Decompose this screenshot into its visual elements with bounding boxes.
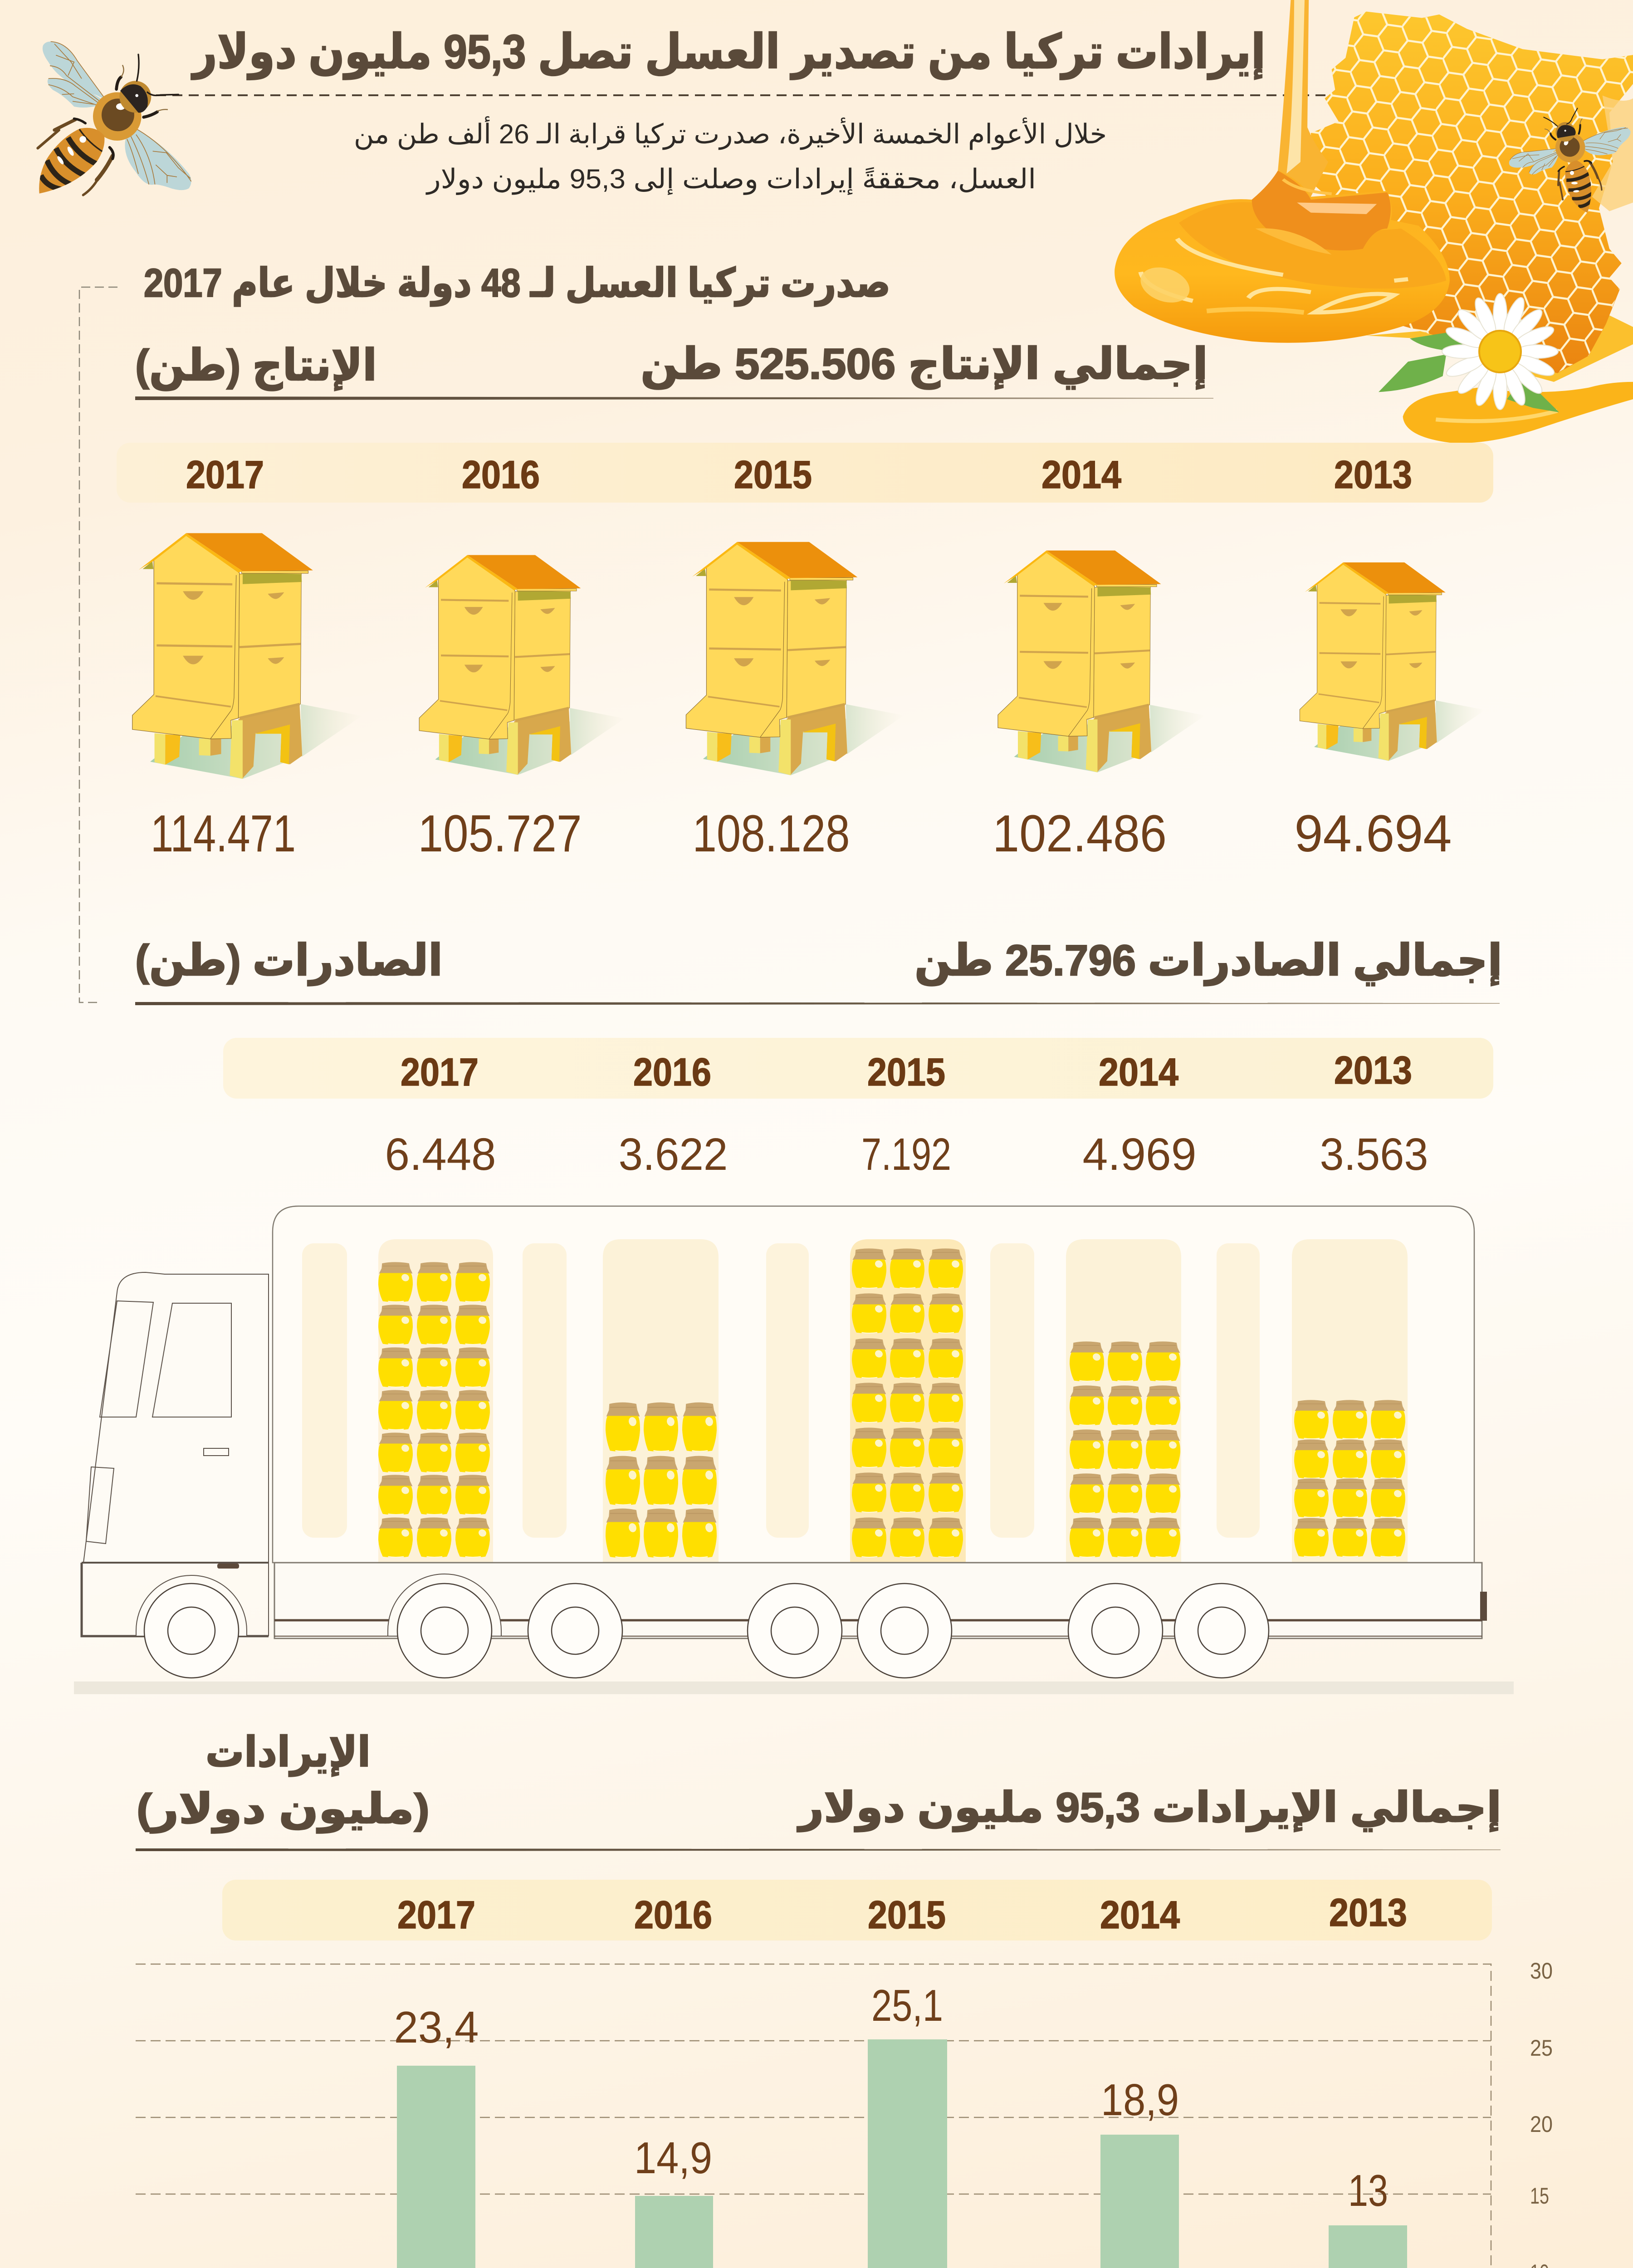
bar values: 25,1 <box>871 1980 943 2030</box>
truck wheels <box>144 1584 1269 1678</box>
y axis labels: 20 <box>1530 2112 1553 2137</box>
narrow cargo columns <box>302 1243 1260 1538</box>
truck chassis <box>274 1563 1487 1638</box>
exports values: 3.622 <box>619 1129 728 1180</box>
beehive 2015 <box>686 542 904 775</box>
daisy leaves <box>1379 332 1559 412</box>
exports year labels: 2014 <box>1099 1051 1178 1094</box>
production values <box>151 805 1452 863</box>
exports year labels <box>401 1049 1412 1094</box>
production values: 108.128 <box>692 805 850 863</box>
y axis labels <box>1530 1958 1553 2268</box>
exports year labels: 2017 <box>401 1051 479 1094</box>
title: إيرادات تركيا من تصدير العسل تصل 95,3 مليون دولار <box>191 25 1266 80</box>
honey stream <box>1262 0 1328 202</box>
revenue year labels: 2017 <box>397 1893 475 1937</box>
bee on honeycomb <box>1506 85 1633 214</box>
exports rule <box>135 1002 1500 1005</box>
honey jars 2014 <box>1070 1341 1180 1558</box>
y axis labels: 30 <box>1530 1958 1553 1984</box>
beehive 2014 <box>998 551 1205 772</box>
exports label: الصادرات (طن) <box>135 936 443 986</box>
header dashed rule <box>156 94 1333 96</box>
production total heading: إجمالي الإنتاج 525.506 طن <box>640 340 1208 390</box>
honey and honeycomb illustration <box>1115 0 1633 443</box>
production values: 102.486 <box>993 805 1167 863</box>
production years band <box>117 443 1493 503</box>
bars <box>397 2039 1407 2268</box>
truck illustration <box>74 1206 1514 1694</box>
honeycomb cells <box>1311 11 1633 373</box>
honey jars 2017 <box>378 1262 490 1558</box>
revenue section <box>136 1729 1553 2268</box>
exports values: 3.563 <box>1320 1129 1428 1180</box>
subtitle text block: خلال الأعوام الخمسة الأخيرة، صدرت تركيا قرابة الـ 26 ألف طن من <box>354 116 1107 150</box>
revenue label: الإيرادات <box>205 1729 371 1777</box>
production year labels: 2017 <box>186 453 264 497</box>
bar values: 13 <box>1348 2165 1388 2215</box>
big honey pool <box>1115 171 1450 343</box>
exports year labels: 2016 <box>633 1051 711 1094</box>
exports values <box>385 1129 1428 1180</box>
production year labels: 2016 <box>462 453 540 497</box>
daisy petals <box>1442 293 1558 410</box>
truck cargo box <box>273 1206 1474 1563</box>
exports section <box>135 936 1502 1180</box>
production rule <box>135 396 1213 400</box>
bar values <box>394 1980 1388 2215</box>
subtitle text block <box>354 116 1107 195</box>
honey jars 2015 <box>852 1248 963 1558</box>
exports to 48 countries heading: صدرت تركيا العسل لـ 48 دولة خلال عام 2017 <box>144 260 890 307</box>
production section <box>117 340 1493 863</box>
production values: 94.694 <box>1295 805 1452 863</box>
exports total heading: إجمالي الصادرات 25.796 طن <box>914 936 1502 986</box>
exports year labels: 2015 <box>867 1051 945 1094</box>
production year labels <box>186 453 1412 497</box>
y axis labels: 15 <box>1530 2183 1549 2209</box>
honey jars 2016 <box>606 1403 717 1558</box>
production label: الإنتاج (طن) <box>135 341 377 391</box>
beehive 2016 <box>419 555 625 775</box>
revenue bar chart <box>136 1958 1553 2268</box>
road <box>74 1681 1514 1694</box>
decorative bracket <box>79 287 117 1002</box>
revenue years band <box>222 1880 1492 1941</box>
production year labels: 2015 <box>734 453 812 497</box>
beehive 2017 <box>132 533 362 779</box>
truck wheel arches <box>136 1574 501 1636</box>
production year labels: 2013 <box>1334 453 1412 497</box>
wide cargo columns <box>378 1239 1408 1563</box>
y axis labels: 25 <box>1530 2035 1553 2061</box>
revenue unit label: (مليون دولار) <box>137 1786 430 1833</box>
revenue total heading: إجمالي الإيرادات 95,3 مليون دولار <box>797 1784 1501 1832</box>
bar values: 14,9 <box>634 2133 712 2183</box>
revenue rule <box>136 1848 1501 1851</box>
bar values: 23,4 <box>394 2002 479 2052</box>
revenue year labels: 2013 <box>1329 1891 1407 1935</box>
beehive 2013 <box>1300 562 1485 761</box>
exports values: 7.192 <box>861 1129 951 1180</box>
bar values: 18,9 <box>1101 2075 1179 2125</box>
icon: bee <box>38 42 191 195</box>
revenue year labels: 2015 <box>868 1893 946 1937</box>
revenue year labels: 2014 <box>1100 1893 1180 1937</box>
production year labels: 2014 <box>1041 453 1121 497</box>
honey jars 2013 <box>1294 1400 1405 1557</box>
exports years band <box>223 1038 1493 1099</box>
exports values: 6.448 <box>385 1129 496 1180</box>
exports year labels: 2013 <box>1334 1049 1412 1092</box>
revenue year labels <box>397 1891 1407 1937</box>
production values: 114.471 <box>151 805 296 863</box>
truck cab <box>82 1272 269 1636</box>
exports values: 4.969 <box>1082 1129 1197 1180</box>
revenue year labels: 2016 <box>634 1893 712 1937</box>
lower honey pool <box>1403 382 1633 443</box>
production values: 105.727 <box>418 805 582 863</box>
subtitle text block: العسل، محققةً إيرادات وصلت إلى 95,3 مليون دولار <box>425 164 1036 195</box>
